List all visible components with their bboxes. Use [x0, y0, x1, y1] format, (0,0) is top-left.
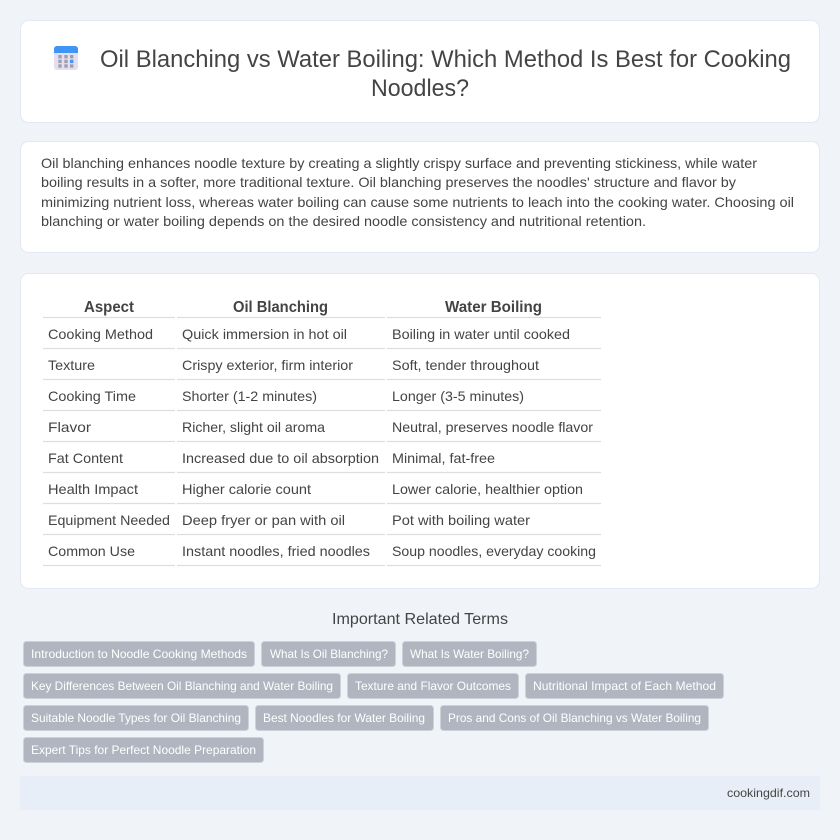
panel: introduction text — [20, 142, 820, 252]
row: flavor: Neutral, preserves noodle flavor — [392, 419, 593, 435]
row: cooking method: Quick immersion in hot oil — [182, 326, 347, 342]
table header — [84, 299, 542, 316]
row: texture: Crispy exterior, firm interior — [182, 357, 353, 373]
table header: Oil Blanching — [233, 299, 328, 316]
related terms chips: Suitable Noodle Types for Oil Blanching — [31, 711, 241, 725]
row: flavor — [48, 419, 593, 435]
panel: title header — [20, 20, 820, 122]
panel: introduction text: minimizing nutrient loss, whereas water boiling can cause some nutrients to leach into the cooking water. Choosing oil — [41, 194, 794, 210]
row: health impact: Higher calorie count — [182, 481, 311, 497]
related terms chips: Nutritional Impact of Each Method — [533, 679, 716, 693]
panel: title header: Noodles? — [371, 75, 469, 102]
table header: Aspect — [84, 299, 135, 316]
row: health impact — [48, 481, 583, 497]
panel: comparison table — [20, 274, 820, 588]
row: cooking method: Cooking Method — [48, 326, 153, 342]
footer — [20, 776, 820, 810]
icon: calendar — [54, 46, 78, 70]
row: common use: Common Use — [48, 543, 135, 559]
heading: related terms: Important Related Terms — [332, 611, 508, 628]
row: common use: Soup noodles, everyday cooking — [392, 543, 596, 559]
row: texture: Texture — [48, 357, 95, 373]
related terms chips: Key Differences Between Oil Blanching and Water Boiling — [31, 679, 333, 693]
row: health impact: Health Impact — [48, 481, 138, 497]
row: common use: Instant noodles, fried noodles — [182, 543, 370, 559]
footer: cookingdif.com — [727, 786, 810, 800]
related terms chips: Texture and Flavor Outcomes — [355, 679, 511, 693]
related terms chips: Introduction to Noodle Cooking Methods — [31, 647, 247, 661]
related terms chips: Best Noodles for Water Boiling — [263, 711, 425, 725]
title: Oil Blanching vs Water Boiling: Which Method Is Best for Cooking — [100, 46, 791, 73]
row: equipment needed — [48, 512, 530, 528]
related terms chips: What Is Water Boiling? — [410, 647, 529, 661]
row: cooking time: Shorter (1-2 minutes) — [182, 388, 317, 404]
row: fat content — [48, 450, 495, 466]
row: equipment needed: Equipment Needed — [48, 512, 170, 528]
table header: Water Boiling — [445, 299, 542, 316]
related terms chips: Expert Tips for Perfect Noodle Preparation — [31, 743, 256, 757]
row: equipment needed: Pot with boiling water — [392, 512, 530, 528]
related terms chips: Pros and Cons of Oil Blanching vs Water Boiling — [448, 711, 701, 725]
row: texture — [48, 357, 539, 373]
row: flavor: Richer, slight oil aroma — [182, 419, 325, 435]
related terms chips: What Is Oil Blanching? — [270, 647, 388, 661]
row: cooking method: Boiling in water until cooked — [392, 326, 570, 342]
row: fat content: Increased due to oil absorption — [182, 450, 379, 466]
row: texture: Soft, tender throughout — [392, 357, 539, 373]
row: cooking method — [48, 326, 570, 342]
row: cooking time: Cooking Time — [48, 388, 136, 404]
row: fat content: Fat Content — [48, 450, 123, 466]
panel: introduction text: Oil blanching enhances noodle texture by creating a slightly crispy surface and preventing stickiness, while water — [41, 155, 757, 171]
panel: introduction text: boiling results in a softer, more traditional texture. Oil blanching preserves the noodles' structure and flavor by — [41, 174, 736, 190]
related terms chips — [24, 642, 724, 762]
row: flavor: Flavor — [48, 419, 91, 435]
row: fat content: Minimal, fat-free — [392, 450, 495, 466]
row: equipment needed: Deep fryer or pan with oil — [182, 512, 345, 528]
panel: introduction text: blanching or water boiling depends on the desired noodle consistency and nutritional retention. — [41, 213, 646, 229]
row: common use — [48, 543, 596, 559]
row: health impact: Lower calorie, healthier option — [392, 481, 583, 497]
row: cooking time: Longer (3-5 minutes) — [392, 388, 524, 404]
row: cooking time — [48, 388, 524, 404]
